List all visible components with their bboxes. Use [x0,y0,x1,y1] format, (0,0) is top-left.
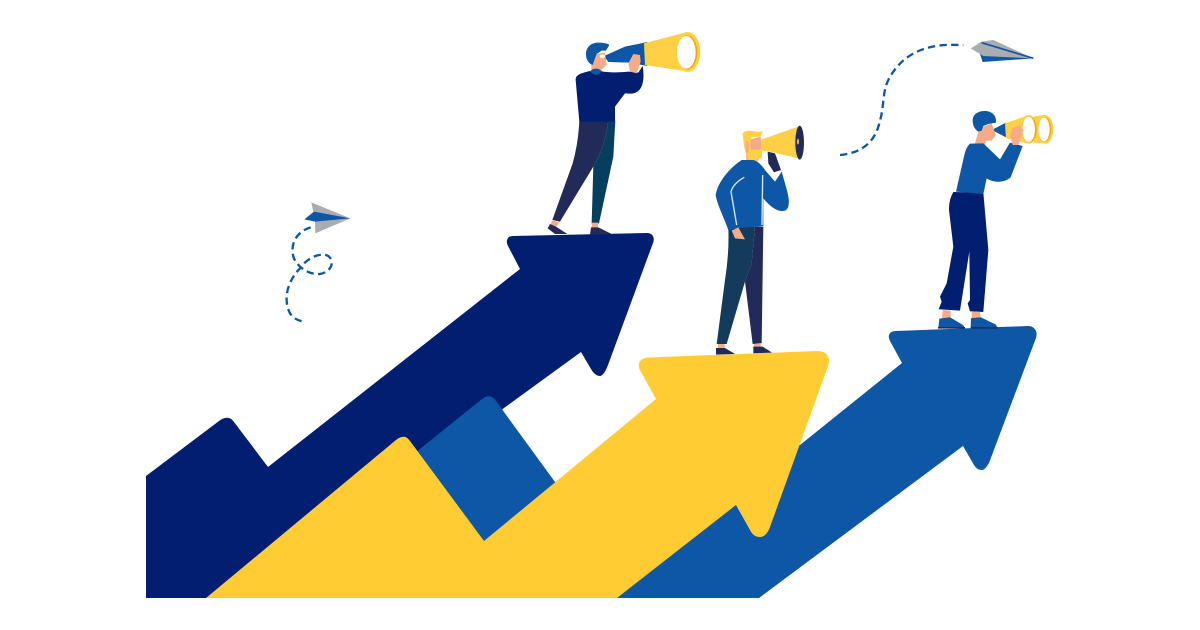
figure: man with telescope [548,32,700,235]
head [586,43,609,77]
icon: paper plane left [287,202,350,321]
head [743,131,763,165]
trousers [939,192,988,312]
hand [628,54,641,73]
arrow: navy [146,233,654,598]
icon: binoculars [992,115,1053,144]
sweater [576,66,643,122]
figure: man with megaphone [716,126,804,355]
sweater seams [731,175,763,225]
hand [1010,125,1023,145]
plane body [971,40,1033,62]
feet [938,310,998,329]
flight path [287,227,332,321]
head [973,111,996,147]
trousers [717,227,763,344]
trousers [552,121,615,223]
feet [548,221,612,235]
icon: telescope [604,32,700,72]
icon: paper plane right [840,40,1033,155]
sweater [716,160,789,230]
plane body [304,202,350,233]
flight path [840,45,963,155]
feet [716,344,772,355]
figure: man with binoculars [938,111,1053,329]
arrow: blue [400,326,1037,598]
arrow: yellow [206,351,829,598]
icon: megaphone [760,126,804,172]
sweater [956,143,1023,194]
hand [732,227,745,239]
